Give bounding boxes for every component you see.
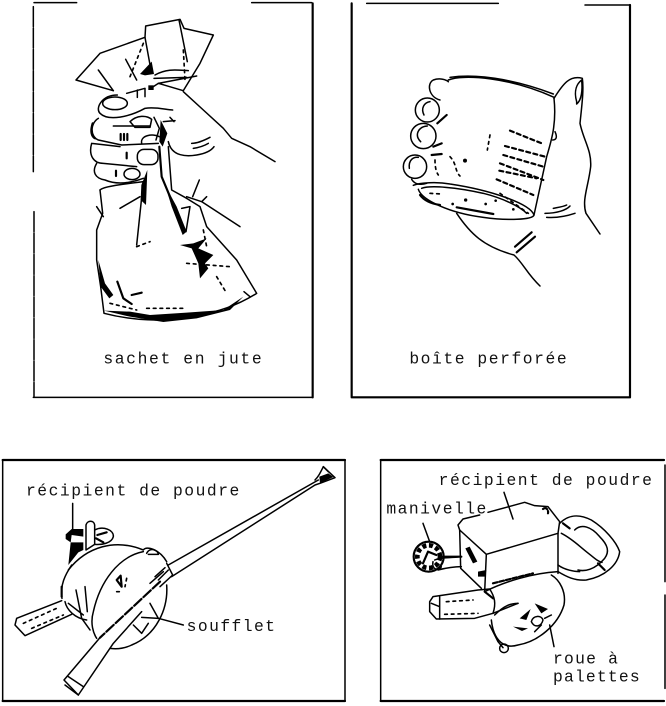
icon: nozzle tube and front handle [64, 467, 335, 695]
panel frame [33, 3, 313, 397]
icon: side handle [558, 516, 620, 580]
icon: powder container [66, 503, 113, 565]
icon: perforated can [413, 76, 555, 219]
caption: sachet en jute: sachet en jute [103, 349, 262, 368]
icon: rear handle [15, 601, 87, 636]
panel: soufflet [3, 460, 345, 701]
panel frame [3, 460, 345, 701]
icon: fingers holding the can [403, 79, 448, 184]
label: soufflet: soufflet [187, 617, 275, 636]
icon: powder box [458, 492, 560, 592]
panel: boîte perforée [352, 3, 630, 397]
icon: body of the jute bag [97, 120, 257, 322]
panel: sachet en jute [33, 3, 313, 397]
caption: boîte perforée: boîte perforée [409, 349, 567, 368]
icon: bellows body [62, 545, 183, 649]
icon: paddle wheel [490, 575, 564, 653]
panel frame [352, 3, 630, 397]
icon: tube outlet [430, 589, 518, 619]
icon: gripping hand and arm [91, 92, 275, 227]
label: palettes: palettes [553, 668, 640, 687]
icon: crank wheel [414, 523, 461, 572]
icon: top of the jute bag [76, 19, 213, 97]
icon: thumb and palm [457, 78, 600, 286]
panel: roue à palettes [381, 460, 665, 701]
label: manivelle: manivelle [386, 499, 486, 518]
label: récipient de poudre: récipient de poudre [439, 471, 652, 490]
label: récipient de poudre: récipient de poudre [26, 482, 239, 501]
label: roue à: roue à [553, 649, 618, 668]
panel frame [381, 460, 665, 701]
